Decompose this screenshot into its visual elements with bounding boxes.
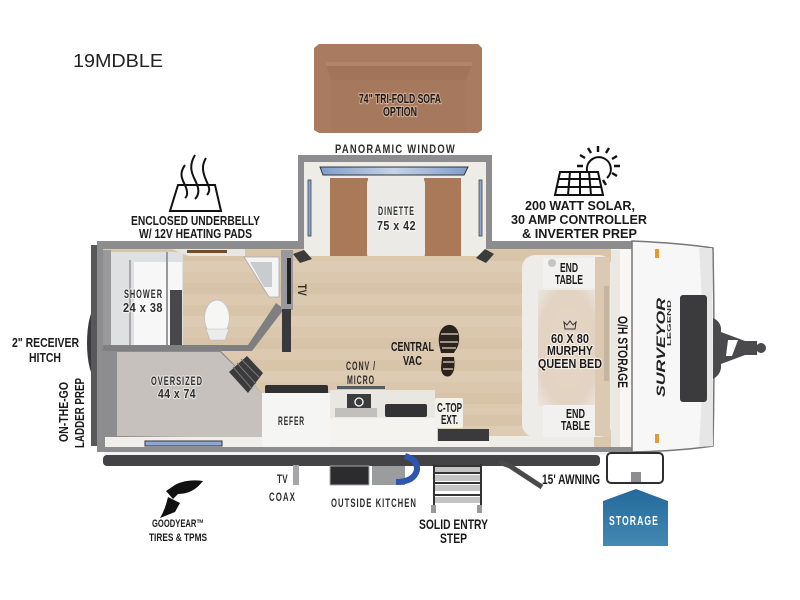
solid entry step label: STEP [440,530,467,546]
bed label [538,332,602,371]
outside kitchen label: OUTSIDE KITCHEN [331,496,417,510]
solid entry step label [419,516,488,546]
rear storage carpet [103,351,262,447]
steps to bed [229,356,263,393]
dinette label [377,204,416,233]
central vac label: VAC [403,354,422,368]
tv wall [281,250,293,310]
countertop extension: EXT. [441,413,458,427]
conv micro label: CONV / [346,359,376,373]
end table top [543,258,595,288]
conv micro label [337,359,385,389]
counter strip [172,249,245,256]
ladder label: ON-THE-GO [57,382,71,442]
surveyor logo: LEGEND [667,300,673,346]
front cap [632,241,714,452]
icon: heating pads [170,155,221,211]
solid entry step label: SOLID ENTRY [419,516,488,532]
rear bumper [91,245,97,446]
surveyor logo [654,298,673,397]
hitch label [12,336,79,365]
ladder label: LADDER PREP [73,378,87,448]
dinette seat right [424,178,461,258]
goodyear label [149,518,207,544]
end table top: END [560,261,578,275]
oversized label: 44 x 74 [158,386,196,401]
partition walls [103,303,284,351]
icon: solar panel [555,146,620,195]
goodyear label: GOODYEAR™ [152,518,204,530]
underbelly label: W/ 12V HEATING PADS [139,227,252,241]
oversized label [151,374,203,401]
panoramic window label: PANORAMIC WINDOW [335,142,456,156]
murphy bed [522,255,612,437]
sofa option [314,44,482,133]
central vac label [391,340,434,368]
interior floor [103,249,630,447]
tv coax post [293,465,299,485]
bed label: MURPHY [547,344,594,358]
overhead storage label: O/H STORAGE [615,316,631,388]
slide vents [293,249,494,263]
bathroom sink [244,257,279,297]
frame rail [103,455,600,466]
side windows [308,180,482,236]
storage badge [603,489,668,546]
hitch [713,318,766,379]
towel rack [187,250,227,253]
body walls [97,155,640,452]
end table bottom [543,405,595,437]
hitch label: HITCH [29,351,61,365]
surveyor logo: SURVEYOR [654,298,668,397]
solar label: 30 AMP CONTROLLER [511,213,647,227]
awning arm [499,462,542,487]
storage badge: STORAGE [609,513,659,528]
front window [680,295,707,402]
shower [110,252,183,345]
tv coax label: TV [277,472,288,486]
slide room frame [304,162,486,256]
solar label [511,199,647,241]
kitchen counter [330,390,437,447]
tv label: TV [295,284,309,296]
end table bottom: END [566,407,585,421]
dinette table [367,178,425,259]
solar label: & INVERTER PREP [522,227,637,241]
icon: crown [564,321,576,329]
sofa option: OPTION [383,105,417,119]
entry step [431,464,482,513]
countertop extension [435,398,463,428]
central vac label: CENTRAL [391,340,434,354]
oversized label: OVERSIZED [151,374,203,388]
storage hatch [607,453,663,483]
goodyear label: TIRES & TPMS [149,532,207,544]
dinette label: DINETTE [378,204,415,218]
tv coax label [269,472,296,504]
slide floor strip [304,256,486,261]
rear window [145,441,222,446]
sofa option: 74" TRI-FOLD SOFA [359,92,441,106]
ladder label [57,378,87,448]
dinette label: 75 x 42 [377,218,416,233]
end table top: TABLE [555,273,583,287]
toilet [204,300,230,340]
amber lights [655,249,659,443]
underbelly label [131,214,261,241]
solar label: 200 WATT SOLAR, [525,199,635,213]
outside kitchen appliances [330,456,417,485]
hitch label: 2" RECEIVER [12,336,79,350]
icon: goodyear winged foot [160,480,203,518]
shower label: SHOWER [124,287,163,301]
conv micro label: MICRO [347,373,375,387]
refrigerator: REFER [278,414,305,428]
dinette seat left [330,178,368,258]
slide room window [320,167,468,175]
tv coax label: COAX [269,490,296,504]
entry door block [438,429,489,442]
bed label: QUEEN BED [538,357,602,371]
overhead storage [611,249,632,447]
bed label: 60 X 80 [551,332,589,346]
countertop extension: C-TOP [437,401,462,415]
shower label [123,287,163,315]
underbelly label: ENCLOSED UNDERBELLY [131,214,261,228]
end table bottom: TABLE [561,419,590,433]
rear wheel [87,308,105,378]
floor plan [87,155,766,513]
awning label: 15' AWNING [542,471,600,487]
shower label: 24 x 38 [123,300,163,315]
icon: boot print [439,325,459,377]
refrigerator [262,385,330,447]
title: 19MDBLE [73,51,163,71]
